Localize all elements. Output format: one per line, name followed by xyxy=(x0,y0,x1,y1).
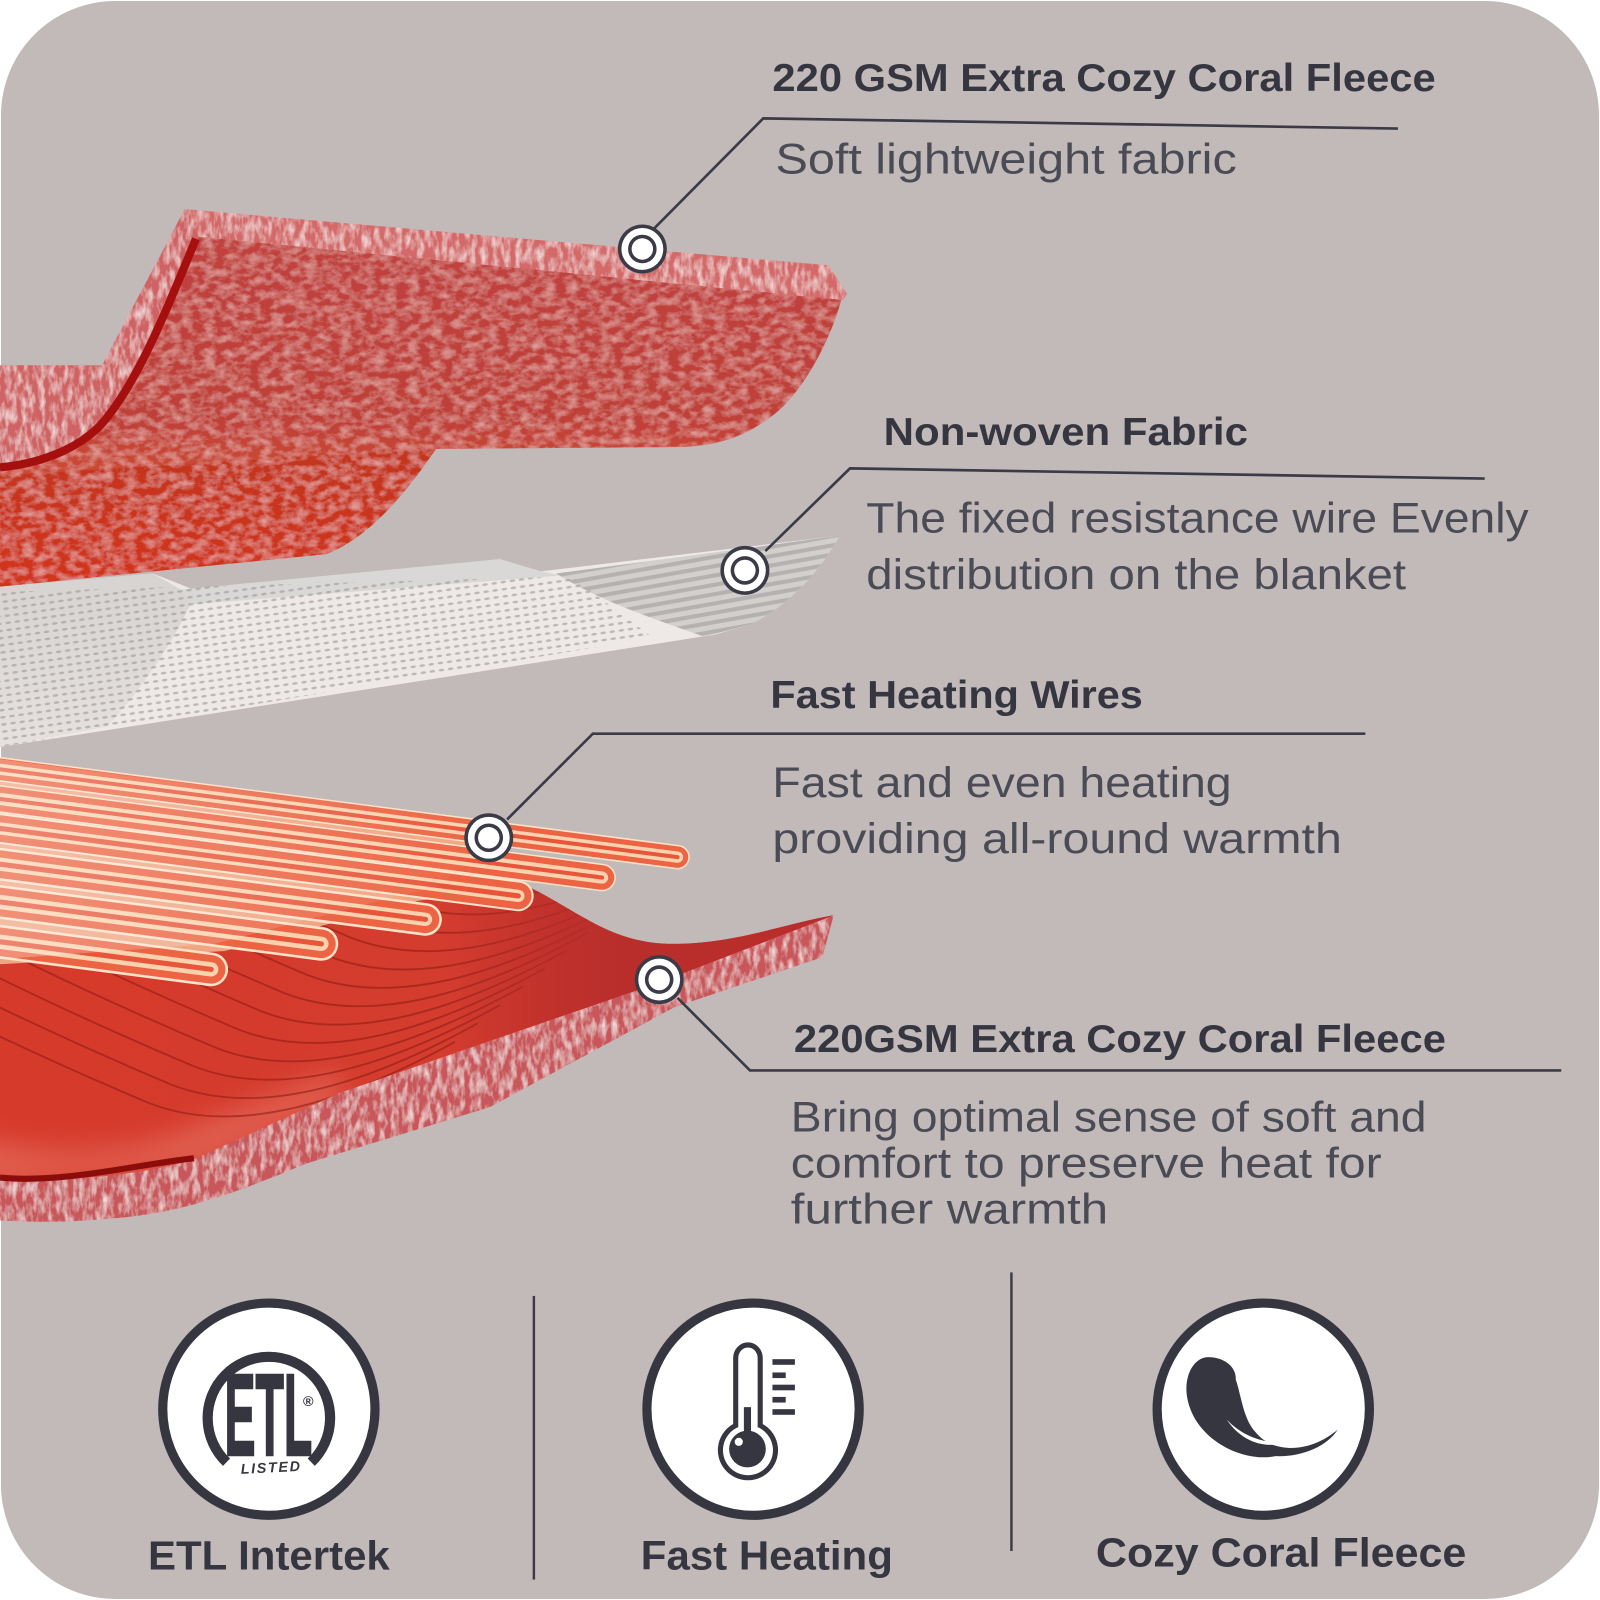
thermometer ticks xyxy=(772,1359,795,1415)
fleece red face xyxy=(0,888,834,1179)
divider left xyxy=(533,1296,535,1580)
thermometer highlight xyxy=(735,1438,743,1446)
heading: top fleece: 220 GSM Extra Cozy Coral Fleece xyxy=(772,57,1436,100)
registered mark: ® xyxy=(303,1394,314,1410)
feather slash xyxy=(1227,1419,1284,1445)
pale fleece fold on left xyxy=(0,209,199,464)
fleece dark groove xyxy=(0,239,196,467)
text: non-woven description: distribution on the blanket xyxy=(866,551,1406,599)
thermometer body xyxy=(720,1345,776,1478)
top coral fleece layer xyxy=(0,209,847,587)
heating wires xyxy=(0,759,678,969)
mesh right shaded fold xyxy=(556,536,840,637)
wire finger 6 xyxy=(0,938,211,969)
fleece pink edge strip xyxy=(0,915,834,1222)
heading: non-woven fabric: Non-woven Fabric xyxy=(884,411,1248,454)
divider right xyxy=(1010,1272,1013,1551)
heading: fast heating wires: Fast Heating Wires xyxy=(770,674,1143,717)
icon: feather xyxy=(1157,1303,1369,1515)
wire finger 1 xyxy=(0,765,678,857)
non-woven white fabric layer xyxy=(0,536,840,747)
mesh ribs xyxy=(556,536,840,637)
icon: ETL listed xyxy=(163,1303,375,1515)
text: heating wires description: Fast and even heating xyxy=(772,759,1232,807)
mesh top grey strip xyxy=(179,559,561,604)
mesh dots xyxy=(0,577,653,747)
text: non-woven description xyxy=(866,495,1529,599)
thermometer mercury xyxy=(729,1407,766,1467)
marker 2 xyxy=(720,546,769,595)
text: bottom fleece description: comfort to preserve heat for xyxy=(791,1140,1382,1188)
marker 4 xyxy=(635,955,684,1004)
icon: ETL listed: ETL xyxy=(224,1350,312,1480)
label: ETL Intertek: ETL Intertek xyxy=(148,1532,390,1578)
mesh base xyxy=(0,536,840,747)
feather shape xyxy=(1186,1357,1338,1457)
text: bottom fleece description: Bring optimal sense of soft and xyxy=(791,1094,1427,1142)
top edge strip of fleece xyxy=(185,209,847,300)
main face of top fleece xyxy=(0,237,842,476)
callout 4 leader xyxy=(678,998,1561,1070)
callout 2 leader xyxy=(765,468,1485,551)
ETL ring xyxy=(208,1357,330,1462)
wire finger 4 xyxy=(0,860,426,919)
text: heating wires description xyxy=(772,759,1342,863)
text: non-woven description: The fixed resistance wire Evenly xyxy=(866,495,1529,543)
fleece wave lines xyxy=(0,888,834,1178)
mesh left shaded fold xyxy=(0,573,194,747)
text: bottom fleece description xyxy=(791,1094,1427,1233)
bottom coral fleece layer xyxy=(0,888,834,1222)
marker 1 xyxy=(618,224,667,273)
wire finger 3 xyxy=(0,824,518,896)
fleece bottom groove xyxy=(0,1158,194,1179)
text: heating wires description: providing all-round warmth xyxy=(772,815,1342,863)
icon: thermometer xyxy=(647,1303,859,1515)
callout 1 leader xyxy=(653,118,1398,230)
callout 3 leader xyxy=(507,734,1365,819)
wire pale overlay xyxy=(0,759,510,959)
lower flap of top fleece xyxy=(0,445,439,587)
LISTED text: LISTED xyxy=(240,1459,300,1478)
fleece lower glow xyxy=(0,1071,347,1189)
heading: bottom fleece: 220GSM Extra Cozy Coral Fleece xyxy=(794,1018,1446,1061)
text: bottom fleece description: further warmth xyxy=(791,1185,1108,1233)
wire base xyxy=(0,759,510,964)
marker 3 xyxy=(464,813,513,862)
label: Fast Heating: Fast Heating xyxy=(641,1532,893,1578)
wire finger 2 xyxy=(0,795,602,878)
label: Cozy Coral Fleece: Cozy Coral Fleece xyxy=(1096,1529,1466,1575)
text: top fleece description: Soft lightweight fabric xyxy=(776,135,1237,183)
fleece dark shade at right xyxy=(493,888,834,1040)
wire finger 5 xyxy=(0,898,321,944)
